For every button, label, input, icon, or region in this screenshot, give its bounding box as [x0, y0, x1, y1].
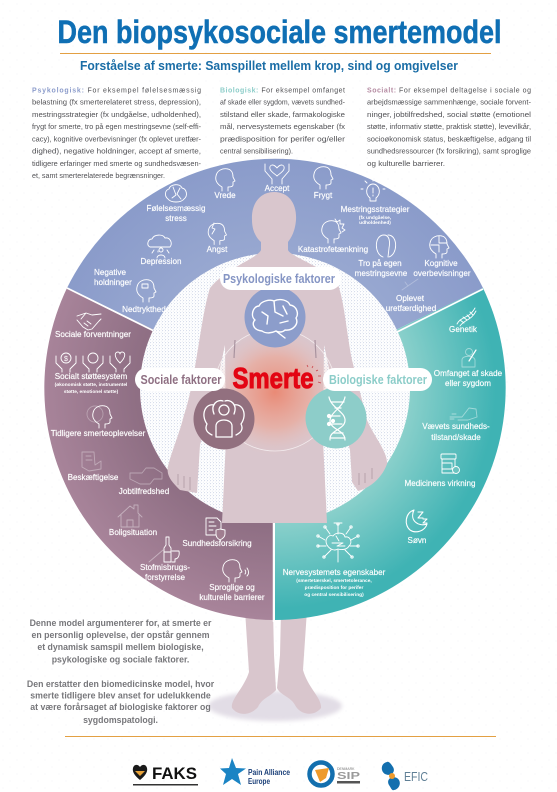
- item: sproglige og kulturelle barrierer: [199, 560, 265, 602]
- text block: psykologisk: mestringsstrategier (fx undgåelse, udholdenhed),: [32, 111, 201, 119]
- subtitle: Forståelse af smerte: Samspillet mellem krop, sind og omgivelser: [80, 59, 458, 73]
- item: oplevet uretfærdighed: [386, 279, 436, 313]
- text block: model description: Denne model argumenterer for, at smerte er: [30, 618, 212, 628]
- body silhouette: [168, 192, 387, 523]
- item: katastrofetænkning: [298, 219, 368, 254]
- panel: psykologiske faktorer ring: [67, 159, 483, 388]
- text block: socialt: støtte, informativ støtte, praktisk støtte), levevilkår,: [367, 123, 531, 131]
- item: depression: [141, 235, 181, 266]
- center label: Smerte: Smerte: [232, 363, 314, 395]
- item: jobtilfredshed: Jobtilfredshed: [119, 487, 169, 496]
- item: nervesystemets egenskaber: prædisposition for perifer: [305, 585, 363, 591]
- item: mestringsstrategier: udholdenhed): [359, 220, 391, 226]
- text block: model description: at være forårsaget af biologiske faktorer og: [30, 702, 211, 712]
- text block: socialt: socioøkonomisk status, beskæftigelse, adgang til: [367, 136, 531, 144]
- item: sundhedsforsikring: [182, 518, 252, 548]
- item: boligsituation: [109, 505, 157, 537]
- text block: biologisk: Biologisk: For eksempel omfanget: [220, 88, 345, 94]
- item: oplevet uretfærdighed: uretfærdighed: [386, 304, 436, 313]
- item: kognitive overbevisninger: overbevisninger: [413, 269, 471, 278]
- logo: SIP Denmark: SIP: [337, 771, 360, 782]
- item: negative holdninger: [94, 268, 132, 287]
- text block: psykologisk: frygt for smerte, tro på egen mestringsevne (self-effi-: [32, 123, 202, 131]
- item: negative holdninger: holdninger: [94, 278, 132, 287]
- text block: biologisk: mål, nervesystemets egenskaber (fx: [220, 123, 346, 131]
- item: vrede: Vrede: [214, 191, 236, 200]
- item: stofmisbrugsforstyrrelse: [140, 537, 190, 582]
- item: socialt støttesystem: $: [64, 356, 68, 363]
- item: mestringsstrategier: Mestringsstrategier: [341, 205, 410, 214]
- item: angst: Angst: [207, 245, 228, 254]
- item: nedtrykthed: Nedtrykthed: [122, 305, 166, 314]
- item: følelsesmæssig stress: [147, 185, 205, 223]
- item: følelsesmæssig stress: stress: [165, 214, 187, 223]
- panel: biologiske faktorer ring: [275, 288, 506, 620]
- item: tro på egen mestringsevne: [355, 235, 408, 278]
- pill: biologiske faktorer: [323, 368, 432, 391]
- item: angst: [207, 223, 228, 254]
- text block: socialt: ninger, jobtilfredshed, social støtte (emotionel: [367, 112, 532, 119]
- icon: brain circle: [244, 286, 306, 348]
- item: vævets sundhedstilstand/skade: [422, 408, 490, 442]
- logo: EFIC: [382, 762, 428, 790]
- item: følelsesmæssig stress: Følelsesmæssig: [147, 204, 205, 213]
- item: tidligere smerteoplevelser: Tidligere smerteoplevelser: [51, 429, 146, 438]
- item: accept: Accept: [265, 184, 290, 193]
- item: tidligere smerteoplevelser: [51, 406, 146, 438]
- item: sociale forventninger: Sociale forventninger: [55, 330, 131, 339]
- icon: dna circle: [306, 388, 366, 448]
- item: sproglige og kulturelle barrierer: Sproglige og: [209, 583, 255, 592]
- text block: model description: en personlig oplevelse, der opstår gennem: [32, 630, 210, 640]
- item: mestringsstrategier: [341, 179, 410, 226]
- item: accept: [265, 164, 290, 193]
- item: nervesystemets egenskaber: Nervesystemets egenskaber: [283, 568, 386, 577]
- item: kognitive overbevisninger: [413, 236, 471, 278]
- text block: socialt: sundhedsressourcer (fx forsikring), samt sproglige: [367, 148, 531, 156]
- item: vrede: [214, 169, 236, 200]
- item: tro på egen mestringsevne: mestringsevne: [355, 269, 408, 278]
- icon: pain spark: [307, 365, 321, 383]
- pill: sociale faktorer: [135, 368, 225, 391]
- item: beskæftigelse: [68, 452, 119, 482]
- text block: model description: sygdomspatologi.: [83, 715, 158, 725]
- text block: psykologisk: cacy), kognitive overbevisninger (fx oplevet uretfær-: [32, 136, 202, 144]
- legs and feet: [232, 610, 321, 714]
- text block: socialt: [367, 88, 532, 168]
- pill: psykologiske faktorer: Psykologiske faktorer: [223, 272, 335, 286]
- logo: Pain Alliance Europe: Europe: [248, 777, 270, 786]
- item: katastrofetænkning: Katastrofetænkning: [298, 245, 368, 254]
- item: genetik: Genetik: [449, 325, 478, 334]
- item: socialt støttesystem: [55, 352, 130, 395]
- icon: people circle: [194, 388, 254, 450]
- text block: psykologisk: dighed), negative holdninger, accept af smerte,: [32, 148, 201, 156]
- item: nervesystemets egenskaber: og central sensibilisering): [304, 592, 364, 598]
- item: jobtilfredshed: [119, 468, 169, 496]
- finger lines: [178, 468, 372, 490]
- text block: psykologisk: tidligere erfaringer med smerte og sundhedsvæsen-: [32, 161, 202, 168]
- item: mestringsstrategier: (fx undgåelse,: [359, 214, 392, 221]
- item: depression: Depression: [141, 257, 181, 266]
- item: omfanget af skade eller sygdom: eller sygdom: [445, 379, 491, 388]
- logo: EFIC: EFIC: [404, 769, 428, 784]
- item: nervesystemets egenskaber: (smertetærskel, smertetolerance,: [296, 578, 372, 584]
- text block: psykologisk: [32, 88, 202, 180]
- item: nedtrykthed: [122, 280, 166, 314]
- item: omfanget af skade eller sygdom: Omfanget af skade: [434, 369, 503, 378]
- item: beskæftigelse: Beskæftigelse: [68, 473, 119, 482]
- text block: biologisk: stilstand eller skade, farmakologiske: [220, 112, 345, 119]
- pill: sociale faktorer: Sociale faktorer: [140, 373, 222, 387]
- text block: model description: Den erstatter den biomedicinske model, hvor: [27, 679, 215, 689]
- pill: psykologiske faktorer: [220, 267, 341, 290]
- item: stofmisbrugsforstyrrelse: forstyrrelse: [145, 573, 186, 582]
- item: frygt: [314, 167, 333, 200]
- text block: psykologisk: belastning (fx smerterelateret stress, depression),: [32, 100, 201, 106]
- item: frygt: Frygt: [314, 191, 333, 200]
- text block: model description: smerte tidligere blev anset for udelukkende: [30, 690, 211, 700]
- item: vævets sundhedstilstand/skade: Vævets sundheds-: [422, 422, 490, 431]
- item: sproglige og kulturelle barrierer: kulturelle barrierer: [199, 593, 265, 602]
- item: tro på egen mestringsevne: Tro på egen: [358, 259, 402, 268]
- panel: sociale faktorer ring: [44, 288, 275, 620]
- item: kognitive overbevisninger: Kognitive: [424, 259, 458, 268]
- text block: socialt: Socialt: For eksempel deltagelse i sociale og: [367, 88, 531, 94]
- item: socialt støttesystem: støtte, emotionel støtte): [64, 389, 119, 395]
- logo: FAKS: [133, 764, 198, 786]
- item: stofmisbrugsforstyrrelse: Stofmisbrugs-: [140, 563, 190, 572]
- item: søvn: Søvn: [408, 536, 426, 545]
- text block: model description: et dynamisk samspil mellem biologiske,: [37, 642, 204, 652]
- item: omfanget af skade eller sygdom: [434, 348, 503, 388]
- item: oplevet uretfærdighed: Oplevet: [396, 294, 425, 303]
- logo: SIP Denmark: [310, 762, 360, 786]
- item: vævets sundhedstilstand/skade: tilstand/skade: [431, 433, 481, 442]
- inner disc stipple: [140, 253, 410, 523]
- item: sociale forventninger: [55, 313, 131, 339]
- text block: biologisk: central sensibilisering).: [220, 148, 293, 156]
- text block: biologisk: prædisposition for perifer og/eller: [220, 136, 346, 144]
- logo: FAKS: FAKS: [152, 764, 197, 783]
- text block: socialt: og kulturelle barrierer.: [367, 161, 445, 168]
- item: sundhedsforsikring: Sundhedsforsikring: [182, 539, 252, 548]
- item: medicinens virkning: [404, 454, 476, 488]
- pill: biologiske faktorer: Biologiske faktorer: [329, 373, 427, 387]
- item: socialt støttesystem: (økonomisk støtte, instrumentel: [55, 382, 127, 388]
- item: søvn: [406, 510, 427, 545]
- text block: model description: psykologiske og sociale faktorer.: [52, 654, 189, 664]
- text block: socialt: arbejdsmæssige sammenhænge, sociale forvent-: [367, 100, 532, 106]
- item: nervesystemets egenskaber: [283, 523, 386, 598]
- floor shadow: [208, 691, 342, 721]
- logo: Pain Alliance Europe: [220, 758, 290, 786]
- item: boligsituation: Boligsituation: [109, 528, 157, 537]
- item: genetik: [449, 308, 478, 334]
- logo: SIP Denmark: DENMARK: [337, 767, 355, 771]
- text block: psykologisk: Psykologisk: For eksempel følelsesmæssig: [32, 88, 201, 94]
- text block: biologisk: [220, 88, 346, 156]
- text block: model description: [27, 618, 215, 725]
- item: medicinens virkning: Medicinens virkning: [404, 479, 476, 488]
- text block: psykologisk: et, samt smerterelaterede begrænsninger.: [32, 173, 165, 180]
- item: negative holdninger: Negative: [94, 268, 126, 277]
- logo: Pain Alliance Europe: Pain Alliance: [248, 768, 290, 777]
- text block: biologisk: af skade eller sygdom, vævets sundhed-: [220, 100, 346, 106]
- item: socialt støttesystem: Socialt støttesystem: [55, 372, 127, 381]
- pain glow: [211, 328, 339, 456]
